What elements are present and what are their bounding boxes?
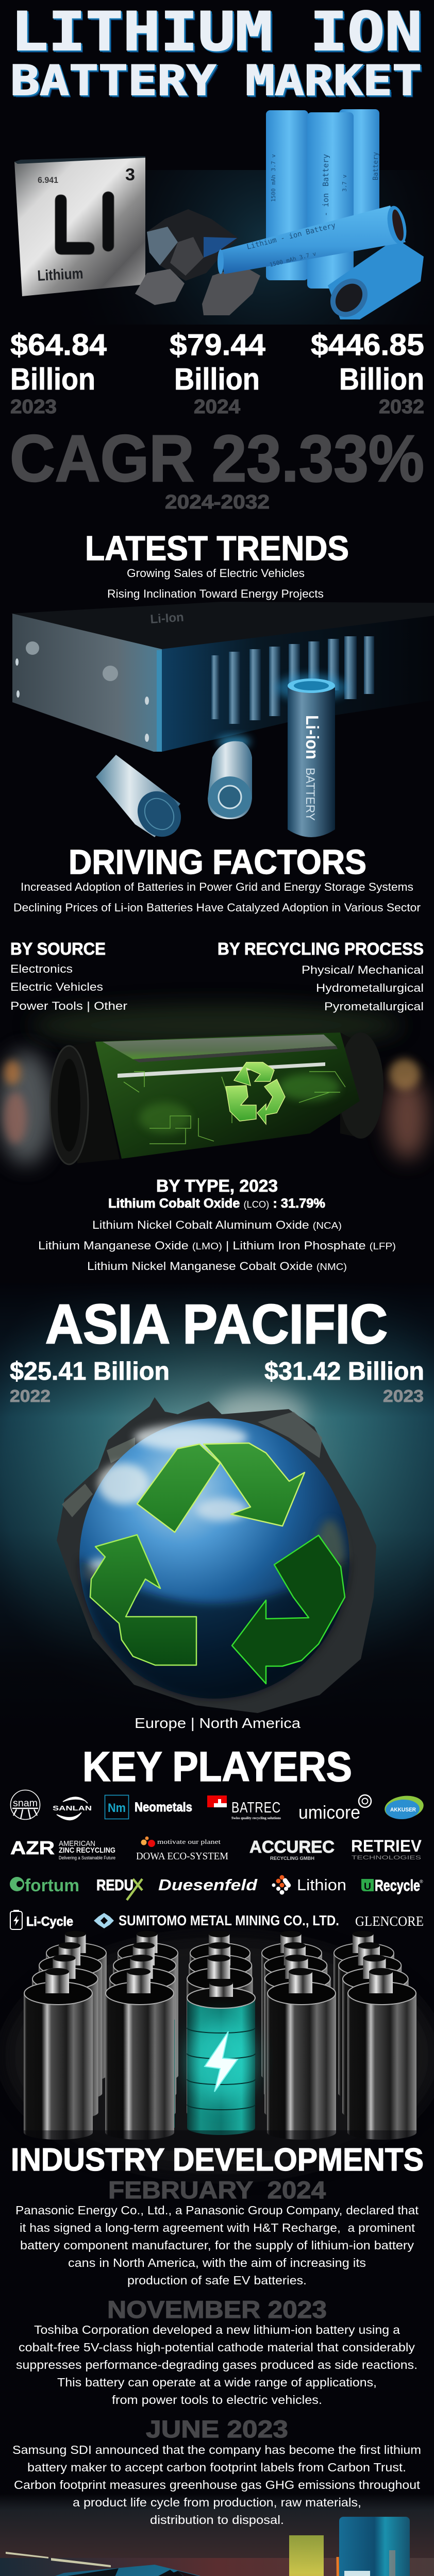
heading: industry developments: INDUSTRY DEVELOPMENTS — [11, 2142, 424, 2178]
icon: standing blue batteries: Battery — [372, 152, 380, 180]
icon: tilted battery — [208, 741, 252, 819]
icon: standing blue batteries: 3.7 v — [341, 175, 348, 192]
logo: neometals: Nm — [108, 1801, 126, 1815]
logo: lithion — [272, 1875, 346, 1895]
panel: by type 2023: Lithium Cobalt Oxide (LCO) : 31.79% — [108, 1196, 325, 1211]
stat: 2023 market size: Billion — [10, 362, 95, 396]
panel: June 2023 development: distribution to disposal. — [150, 2513, 284, 2527]
panel: June 2023 development: Carbon footprint measures greenhouse gas GHG emissions throughout — [14, 2478, 421, 2492]
image: Li-ion battery box with cells — [10, 602, 434, 845]
logo: batrec: Swiss quality recycling solutions — [231, 1816, 281, 1820]
icon: lying battery — [96, 755, 190, 845]
image: Li-ion battery box with cells: Li-Ion — [150, 610, 185, 626]
panel: company logos — [10, 1790, 425, 1929]
logo: duesenfeld: Duesenfeld — [158, 1876, 258, 1894]
panel: February 2024 development — [15, 2176, 419, 2287]
panel: June 2023 development: Samsung SDI announced that the company has become the first lithium — [12, 2443, 421, 2456]
title: BATTERY MARKET — [13, 59, 424, 107]
panel: by recycling process — [218, 939, 424, 1013]
panel: by recycling process: Pyrometallurgical — [324, 1000, 424, 1013]
panel: by source: Power Tools | Other — [10, 999, 127, 1012]
icon: recycling arrows — [90, 1443, 345, 1684]
text block: driving factors list — [13, 880, 421, 914]
panel: by recycling process: Hydrometallurgical — [316, 981, 424, 994]
logo: batrec — [207, 1795, 281, 1820]
heading: asia pacific: ASIA PACIFIC — [45, 1293, 388, 1355]
stat: asia pacific 2022: $25.41 Billion — [10, 1358, 170, 1385]
panel: by type 2023: Lithium Nickel Cobalt Aluminum Oxide (NCA) — [92, 1218, 342, 1231]
stat: 2032 market size — [311, 328, 424, 418]
logo: sumitomo metal mining: SUMITOMO METAL MINING CO., LTD. — [119, 1912, 339, 1928]
stat: asia pacific 2023: 2023 — [383, 1386, 424, 1405]
icon: recycling symbol on battery — [226, 1062, 285, 1124]
icon: orange charging cables — [188, 2557, 338, 2576]
icon: lithium rocks — [135, 209, 260, 315]
panel: June 2023 development — [12, 2415, 421, 2527]
logo: urecycle — [361, 1876, 423, 1894]
image: electric car charging — [0, 2494, 434, 2576]
icon: standing blue batteries: 1500 mAh 3.7 v — [270, 154, 277, 202]
panel: by type 2023: Lithium Manganese Oxide (LMO) | Lithium Iron Phosphate (LFP) — [38, 1239, 396, 1252]
panel: February 2024 development: it has signed a long-term agreement with H&T Recharge, a prominent — [20, 2221, 415, 2234]
logo: azr: AMERICAN — [59, 1839, 95, 1848]
icon: lithium periodic table plate: 6.941 — [38, 175, 58, 185]
icon: lithium periodic table plate: Lithium — [37, 265, 84, 284]
icon: standing Li-ion battery — [288, 679, 335, 837]
panel: February 2024 development: cans in North America, with the aim of increasing its — [68, 2256, 366, 2269]
stat: 2024 market size — [170, 328, 265, 418]
panel: by source: Electronics — [10, 962, 73, 975]
logo: snam — [10, 1790, 40, 1820]
logo: sanlan — [53, 1797, 92, 1820]
logo: accurec: ACCUREC — [249, 1837, 335, 1856]
logo: neometals: Neometals — [135, 1800, 192, 1815]
logo: dowa eco-system: DOWA ECO-SYSTEM — [136, 1851, 228, 1862]
panel: November 2023 development: from power tools to electric vehicles. — [112, 2393, 322, 2406]
icon: charging station — [285, 2517, 434, 2576]
logo: redux: REDU — [96, 1877, 133, 1894]
stat: 2032 market size: $446.85 — [311, 328, 424, 362]
logo: umicore — [298, 1795, 371, 1823]
text block: trends list: Growing Sales of Electric Vehicles — [127, 567, 305, 580]
image: grid of metal battery cells with charged teal cell — [0, 1931, 434, 2174]
panel: February 2024 development: production of safe EV batteries. — [127, 2274, 307, 2287]
stat: 2024 market size: 2024 — [194, 396, 240, 418]
icon: lithium periodic table plate: 3 — [125, 165, 135, 184]
logo: retriev: TECHNOLOGIES — [352, 1855, 421, 1861]
title: BATTERY MARKET — [10, 57, 422, 105]
icon: charging pillar — [289, 2535, 324, 2576]
stat: 2032 market size: Billion — [339, 362, 424, 396]
logo: azr — [10, 1837, 115, 1860]
logo: urecycle: U — [364, 1882, 371, 1892]
panel: November 2023 development: suppresses performance-degrading gases produced as side reactions. — [16, 2358, 418, 2371]
logo: akkuser: AKKUSER — [390, 1807, 416, 1813]
logo: urecycle: Recycle — [375, 1876, 420, 1894]
icon: lying blue batteries: Lithium - ion Battery — [246, 222, 337, 251]
icon: standing Li-ion battery: BATTERY — [303, 768, 317, 821]
logo: sanlan: SANLAN — [53, 1804, 92, 1812]
heading: driving factors: DRIVING FACTORS — [69, 843, 366, 882]
image: green recycled battery — [0, 1005, 428, 1164]
heading: latest trends: LATEST TRENDS — [85, 529, 349, 568]
text block: driving factors list: Declining Prices of Li-ion Batteries Have Catalyzed Adoption in Various Sector — [13, 901, 421, 914]
panel: June 2023 development: battery maker to accept carbon footprint labels from Carbon Trust. — [27, 2461, 406, 2474]
stat: asia pacific 2022: 2022 — [10, 1386, 51, 1405]
panel: February 2024 development: FEBRUARY 2024 — [108, 2176, 326, 2204]
logo: akkuser — [383, 1793, 425, 1821]
icon: standing Li-ion battery: Li-ion — [302, 715, 322, 759]
panel: November 2023 development: NOVEMBER 2023 — [107, 2296, 327, 2323]
panel: by source — [10, 939, 127, 1012]
logo: dowa eco-system: motivate our planet — [157, 1838, 221, 1845]
panel: February 2024 development: Panasonic Energy Co., Ltd., a Panasonic Group Company, declared that — [15, 2204, 419, 2217]
logo: lithion: Lithion — [297, 1876, 346, 1894]
text block: trends list: Rising Inclination Toward Energy Projects — [107, 587, 324, 600]
text block: trends list — [107, 567, 324, 600]
stat: 2024 market size: $79.44 — [170, 328, 265, 362]
heading: key players: KEY PLAYERS — [82, 1743, 352, 1790]
panel: by type 2023 — [38, 1176, 396, 1273]
logo: urecycle: ® — [420, 1879, 423, 1884]
logo: fortum: fortum — [25, 1876, 79, 1895]
logo: azr: AZR — [10, 1837, 55, 1858]
logo: azr: ZINC RECYCLING — [59, 1846, 115, 1855]
title: LITHIUM ION — [12, 2, 423, 64]
icon: charged teal battery with lightning bolt — [187, 1979, 255, 2135]
title: LITHIUM ION — [13, 4, 425, 65]
panel: February 2024 development: battery component manufacturer, for the supply of lithium-ion battery — [20, 2239, 414, 2252]
panel: by source: BY SOURCE — [10, 939, 106, 958]
title: BATTERY MARKET — [11, 58, 423, 106]
logo: li-cycle: Li-Cycle — [26, 1914, 73, 1929]
panel: by recycling process: BY RECYCLING PROCESS — [218, 939, 424, 958]
icon: standing blue batteries — [266, 109, 380, 289]
stat: CAGR: CAGR 23.33% — [10, 422, 424, 496]
panel: by recycling process: Physical/ Mechanical — [302, 963, 424, 976]
panel: by source: Electric Vehicles — [10, 980, 103, 993]
logo: azr: Delivering a Sustainable Future — [59, 1855, 115, 1860]
icon: standing blue batteries: Battery — [321, 154, 330, 187]
logo: dowa eco-system — [136, 1836, 228, 1862]
stat: 2023 market size — [10, 328, 107, 418]
stat: asia pacific 2023: $31.42 Billion — [264, 1358, 424, 1385]
text block: other regions: Europe | North America — [135, 1715, 301, 1731]
panel: November 2023 development: cobalt-free 5V-class high-potential cathode material that considerably — [19, 2341, 415, 2354]
icon: standing blue batteries: - ion — [321, 193, 330, 216]
stat: 2023 market size: 2023 — [10, 396, 57, 418]
logo: batrec: BATREC — [231, 1800, 281, 1816]
panel: by type 2023: Lithium Nickel Manganese Cobalt Oxide (NMC) — [87, 1260, 347, 1273]
logo: neometals — [105, 1795, 192, 1819]
stat: asia pacific 2022 — [10, 1358, 170, 1405]
panel: November 2023 development: Toshiba Corporation developed a new lithium-ion battery using a — [34, 2323, 400, 2336]
logo: snam: snam — [13, 1798, 38, 1809]
title: LITHIUM ION — [11, 1, 422, 63]
stat: 2024 market size: Billion — [174, 362, 260, 396]
panel: June 2023 development: JUNE 2023 — [146, 2415, 288, 2443]
stat: CAGR: 2024-2032 — [165, 492, 270, 513]
text block: driving factors list: Increased Adoption of Batteries in Power Grid and Energy Storage Systems — [21, 880, 413, 893]
icon: lying blue batteries: 1500 mAh 3.7 v — [269, 250, 317, 268]
logo: umicore: umicore — [298, 1802, 360, 1823]
image: earth with recycling arrows — [0, 1283, 434, 1731]
title — [10, 1, 425, 107]
icon: lithium periodic table plate — [14, 156, 145, 296]
logo: glencore: GLENCORE — [355, 1913, 424, 1929]
logo: retriev: RETRIEV — [351, 1837, 422, 1855]
panel: June 2023 development: a product life cycle from production, raw materials, — [73, 2496, 361, 2509]
icon: lying blue batteries — [218, 204, 424, 325]
logo: li-cycle — [10, 1910, 73, 1929]
logo: accurec: RECYCLING GMBH — [270, 1856, 314, 1861]
panel: November 2023 development — [16, 2296, 418, 2406]
stat: asia pacific 2023 — [264, 1358, 424, 1405]
panel: November 2023 development: This battery can operate at a wide range of applications, — [57, 2376, 377, 2389]
stat: 2023 market size: $64.84 — [10, 328, 107, 362]
stat: 2032 market size: 2032 — [379, 396, 424, 418]
panel: by type 2023: BY TYPE, 2023 — [156, 1176, 278, 1195]
hero image: lithium element plate, rocks and blue batteries — [0, 109, 434, 325]
icon: electric car — [0, 2565, 285, 2576]
